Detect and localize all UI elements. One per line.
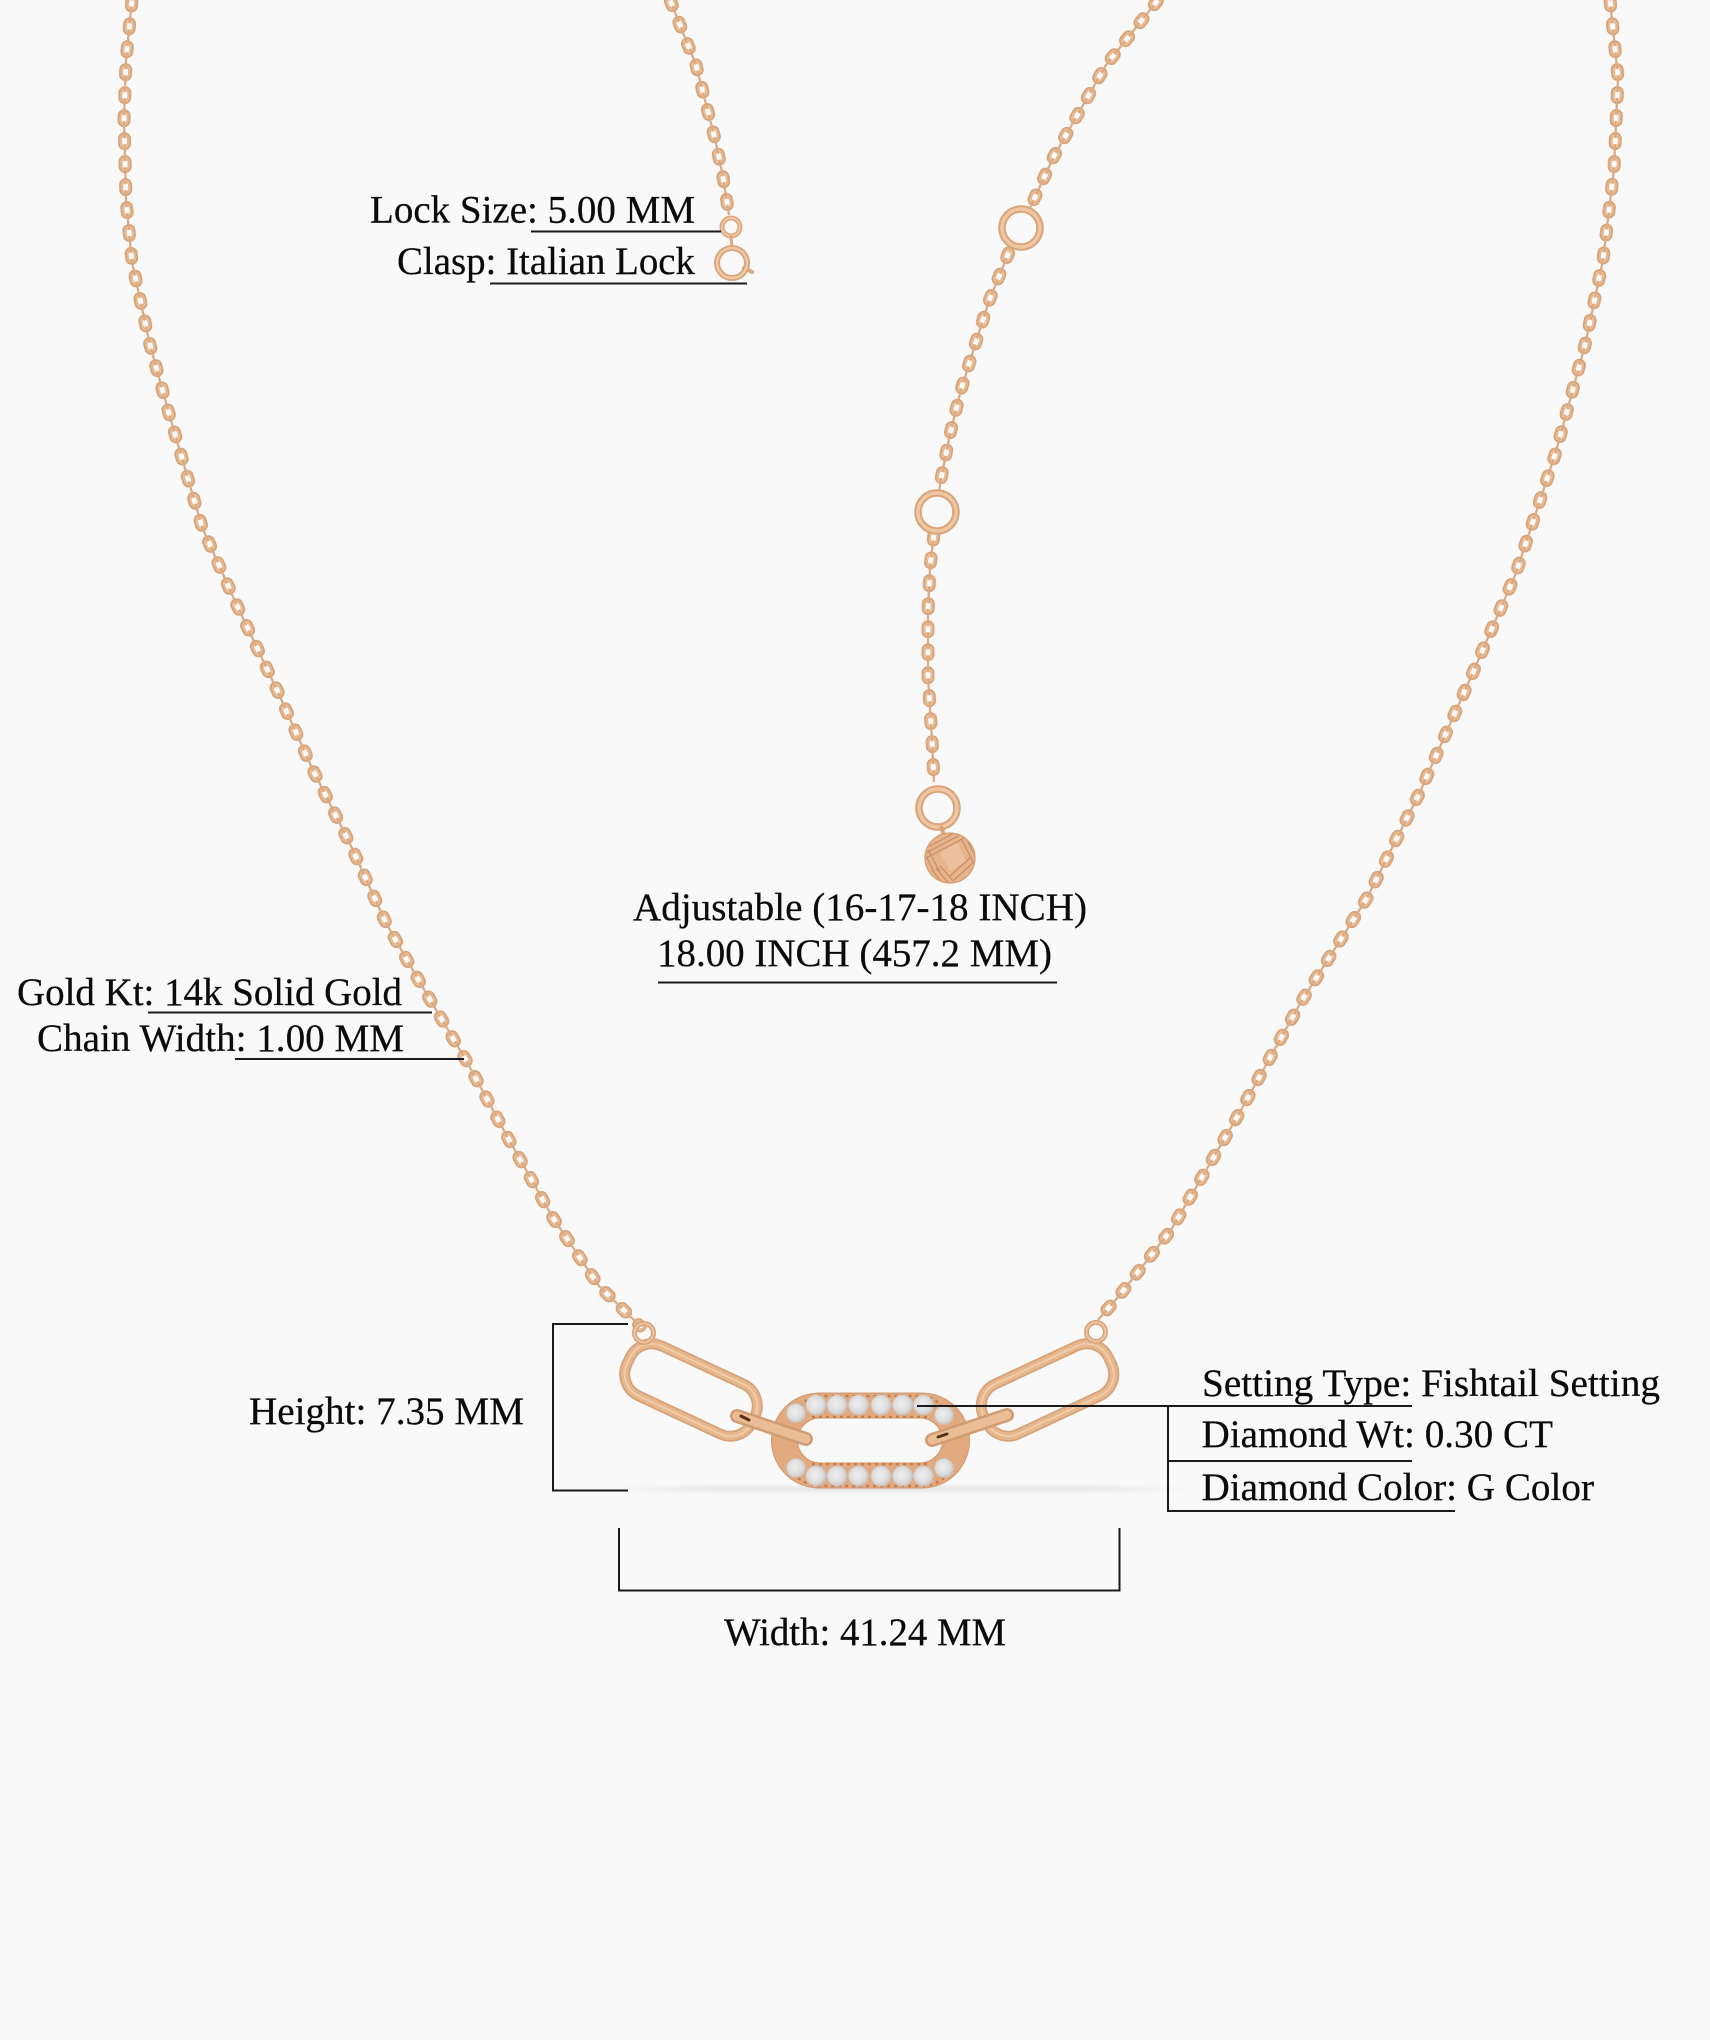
label: adjustable length: 18.00 INCH (457.2 MM) (657, 932, 1052, 975)
label: width with bracket (619, 1528, 1120, 1654)
right paperclip link (973, 1336, 1122, 1444)
label: diamond specifications with leader lines: Diamond Wt: 0.30 CT (1202, 1413, 1553, 1456)
right main chain (1098, 0, 1618, 1320)
clasp-side chain (670, 0, 729, 215)
right top jump ring (1086, 1322, 1106, 1342)
label: diamond specifications with leader lines (917, 1362, 1660, 1511)
centre pave link with diamonds (772, 1393, 970, 1488)
extender chain top (1030, 0, 1158, 208)
diamonds top row (786, 1395, 954, 1424)
prong detail (798, 1396, 944, 1486)
necklace specification diagram (18, 0, 1660, 1646)
extender ring two (918, 493, 956, 531)
label: chain width: Chain Width: 1.00 MM (37, 1017, 404, 1060)
left main chain (124, 0, 640, 1326)
icon: spring clasp (717, 236, 752, 278)
label: height with bracket (249, 1324, 628, 1490)
label: adjustable length: Adjustable (16-17-18 INCH) (633, 886, 1087, 929)
left paperclip link (617, 1336, 765, 1444)
left connector bar (737, 1416, 806, 1439)
diamonds bottom row (786, 1458, 954, 1486)
ground shadow (600, 1487, 1200, 1491)
label: diamond specifications with leader lines: Diamond Color: G Color (1202, 1466, 1594, 1509)
extender ring one (1002, 209, 1040, 247)
small jump ring above clasp (722, 218, 740, 236)
right connector bar (932, 1415, 1007, 1440)
label: adjustable length (633, 886, 1087, 982)
label: lock size: Lock Size: 5.00 MM (370, 189, 695, 232)
label: clasp: Clasp: Italian Lock (397, 240, 695, 283)
extender ring three (919, 789, 957, 827)
label: width with bracket: Width: 41.24 MM (724, 1611, 1006, 1654)
extender chain middle (939, 252, 1009, 492)
left top jump ring (634, 1324, 654, 1342)
icon: patterned end medallion (924, 826, 976, 884)
label: gold karat: Gold Kt: 14k Solid Gold (17, 971, 402, 1014)
label: height with bracket: Height: 7.35 MM (249, 1390, 524, 1433)
label: diamond specifications with leader lines: Setting Type: Fishtail Setting (1202, 1362, 1660, 1405)
extender chain lower (928, 534, 934, 782)
